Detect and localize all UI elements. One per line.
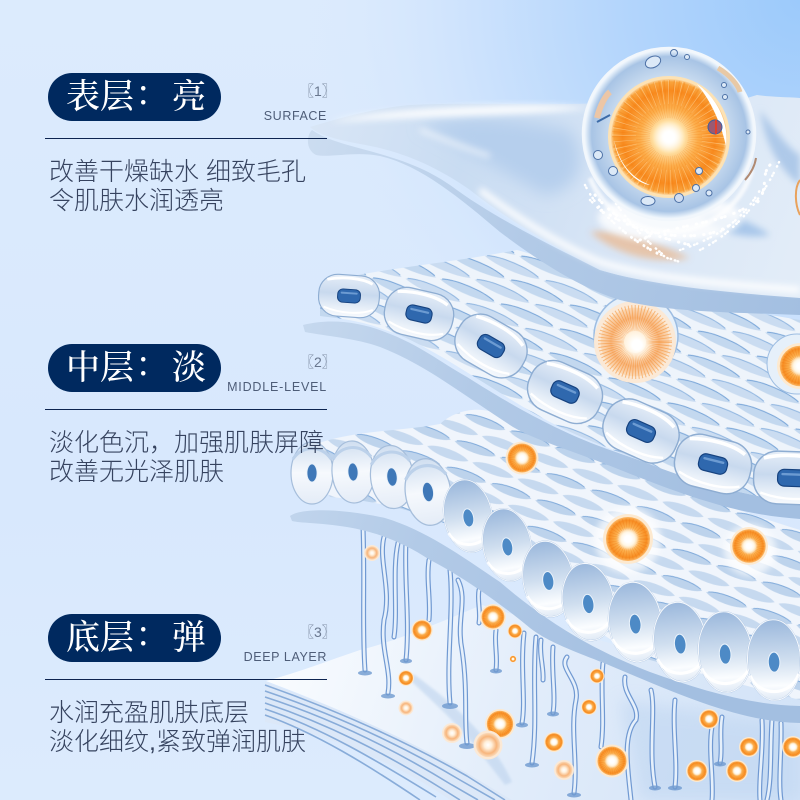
body copy: middle: 改善无光泽肌肤 bbox=[49, 458, 224, 486]
orange core bbox=[608, 76, 730, 198]
surface layer top sheet bbox=[310, 95, 800, 298]
water splash bbox=[585, 160, 780, 262]
pill heading: deep: : bbox=[138, 612, 149, 654]
lower layer base band bbox=[290, 510, 800, 723]
body copy: surface bbox=[49, 158, 306, 215]
strand feet bbox=[358, 658, 726, 798]
English label: surface: SURFACE bbox=[264, 109, 327, 123]
pill heading: surface: 亮 bbox=[172, 79, 206, 116]
pill heading: middle bbox=[48, 344, 221, 392]
panel: surface heading and copy bbox=[45, 71, 336, 215]
panel: middle layer bbox=[303, 250, 800, 519]
right-side sheet tint bbox=[620, 700, 800, 800]
right-edge orange ball fragment bbox=[796, 180, 800, 215]
pill heading: middle: : bbox=[138, 342, 149, 384]
English label: middle-level: MIDDLE-LEVEL bbox=[227, 380, 327, 394]
strands to upper layer bbox=[363, 527, 781, 800]
lower layer cells bbox=[291, 440, 800, 701]
bottom sheet surface bbox=[266, 605, 800, 800]
panel: deep heading and copy bbox=[45, 612, 336, 756]
body copy: deep: 淡化细纹,紧致弹润肌肤 bbox=[49, 728, 306, 756]
sheet fold shading bbox=[405, 675, 512, 785]
pill heading: middle: 淡 bbox=[172, 350, 206, 387]
panel: lower layer bbox=[290, 410, 800, 723]
body copy: middle bbox=[49, 429, 324, 486]
lower layer orange balls bbox=[506, 442, 776, 576]
lower layer honeycomb tissue bbox=[300, 410, 800, 700]
index number 3: 〖3〗 bbox=[300, 624, 336, 640]
panel: surface layer bbox=[308, 48, 800, 315]
divider line bbox=[45, 409, 327, 410]
middle layer wave tissue bbox=[320, 250, 800, 503]
pill heading: surface: 表层 bbox=[66, 79, 134, 116]
surface layer underside band bbox=[308, 130, 800, 315]
English label: deep layer: DEEP LAYER bbox=[244, 650, 327, 664]
panel: middle heading and copy bbox=[45, 342, 336, 486]
stacked sheet edge bbox=[265, 682, 512, 800]
body copy: surface: 令肌肤水润透亮 bbox=[49, 187, 224, 215]
body copy: deep: 水润充盈肌肤底层 bbox=[49, 699, 249, 727]
air bubbles bbox=[594, 50, 750, 206]
pill heading: deep: 弹 bbox=[172, 620, 206, 657]
water sphere with orange core bbox=[583, 48, 756, 231]
pill heading: surface: : bbox=[138, 71, 149, 113]
pill heading: surface bbox=[48, 73, 221, 121]
surface layer shading bbox=[330, 105, 800, 290]
body copy: deep bbox=[49, 699, 306, 756]
middle layer orange balls bbox=[594, 294, 800, 394]
divider line bbox=[45, 679, 327, 680]
pill heading: deep: 底层 bbox=[66, 620, 134, 657]
middle layer base band bbox=[303, 321, 800, 519]
panel: deep layer illustration bbox=[265, 527, 800, 800]
index number 2: 〖2〗 bbox=[300, 354, 336, 370]
index number 1: 〖1〗 bbox=[300, 83, 336, 99]
pill heading: deep bbox=[48, 614, 221, 662]
middle layer cells bbox=[317, 273, 800, 506]
body copy: middle: 淡化色沉，加强肌肤屏障 bbox=[49, 429, 324, 457]
body copy: surface: 改善干燥缺水 细致毛孔 bbox=[49, 158, 306, 186]
divider line bbox=[45, 138, 327, 139]
orange nutrient balls bbox=[364, 545, 800, 782]
pill heading: middle: 中层 bbox=[66, 350, 134, 387]
